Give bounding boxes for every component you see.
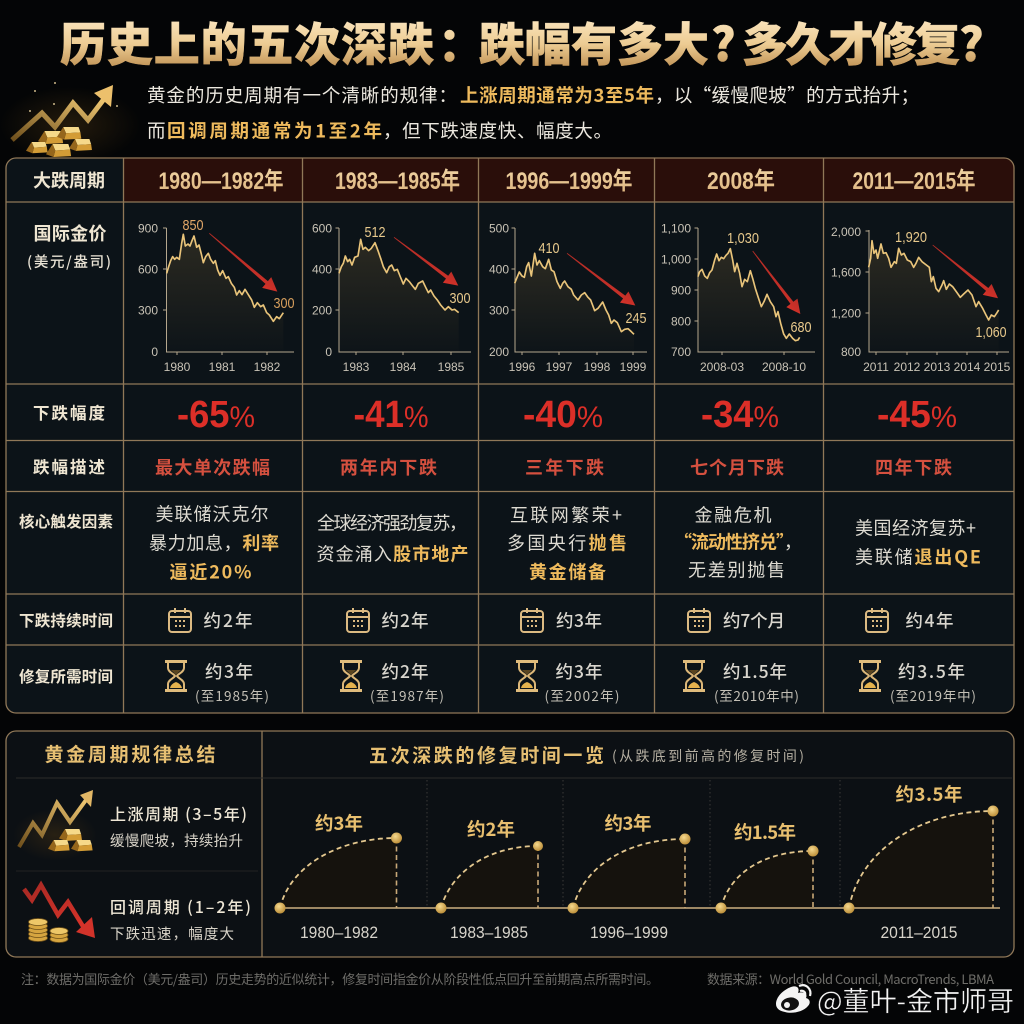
chart: 2008: 1,030 — [727, 230, 759, 247]
row: decline descriptions — [155, 454, 952, 480]
chart: recovery time arcs: 约2年 — [467, 816, 515, 842]
row: decline percentages: -45% — [877, 394, 957, 436]
chart: 1980-1982: 1980 — [164, 360, 191, 374]
column headers: 2008年 — [707, 168, 775, 195]
chart: 2008: 2008-10 — [762, 360, 806, 374]
row: decline duration — [169, 608, 954, 633]
watermark — [776, 980, 1014, 1019]
row: decline descriptions: 三年下跌 — [525, 454, 604, 480]
row labels: 修复所需时间 — [19, 665, 113, 687]
heading: recovery overview: 五次深跌的修复时间一览 — [369, 741, 604, 768]
chart: 1980-1982: 900 — [138, 222, 158, 236]
chart: 2008: 680 — [790, 319, 812, 336]
row labels — [19, 167, 113, 687]
chart: 1996-1999: 1999 — [620, 360, 647, 374]
text: rising cycle — [110, 801, 247, 851]
intro text: ，以“缓慢爬坡”的方式抬升； — [655, 82, 919, 108]
chart: 1983-1985: 400 — [312, 262, 332, 276]
chart: 1996-1999 — [489, 222, 647, 374]
chart: 1996-1999: 1998 — [584, 360, 611, 374]
row: core triggers: 全球经济强劲复苏， — [317, 510, 467, 536]
chart: 2008: 700 — [671, 345, 691, 359]
text: rising cycle: 缓慢爬坡，持续抬升 — [110, 830, 243, 851]
chart: 1996-1999: 245 — [626, 310, 646, 327]
intro text: 黄金的历史周期有一个清晰的规律： — [147, 82, 457, 108]
chart: recovery time arcs: 2011–2015 — [880, 924, 958, 942]
intro text: 上涨周期通常为3至5年 — [460, 82, 654, 108]
chart: 1980-1982 — [138, 217, 294, 374]
row: core triggers: 美联储退出QE — [855, 544, 981, 570]
row: core triggers: 互联网繁荣+ — [510, 502, 622, 528]
row: core triggers: 美联储沃克尔 — [156, 500, 268, 526]
heading: recovery overview — [369, 741, 804, 768]
chart: recovery time arcs — [274, 780, 1000, 942]
row: decline percentages: -34% — [701, 394, 779, 436]
title: 历史上的五次深跌 — [60, 9, 434, 75]
title: ： — [438, 9, 484, 75]
chart: 2011-2015: 1,920 — [895, 229, 927, 246]
row: recovery time — [165, 659, 976, 705]
chart: recovery time arcs: 1996–1999 — [590, 924, 668, 942]
row: decline descriptions: 四年下跌 — [875, 454, 952, 480]
chart: 2011-2015: 2,000 — [831, 225, 861, 239]
column headers: 1996—1999年 — [506, 168, 632, 195]
chart: recovery time arcs: 1983–1985 — [450, 924, 528, 942]
chart: 2008: 1,000 — [661, 252, 691, 266]
chart: 1983-1985: 600 — [312, 222, 332, 236]
row: decline descriptions: 两年内下跌 — [340, 454, 437, 480]
row labels: 大跌周期 — [33, 167, 105, 193]
row: recovery time: 约1.5年 — [723, 659, 787, 684]
row: core triggers: 暴力加息，利率 — [149, 530, 279, 556]
row: core triggers — [149, 500, 981, 584]
row labels: 下跌幅度 — [33, 400, 106, 424]
row: decline duration: 约3年 — [556, 608, 602, 633]
intro text: 而 — [147, 118, 166, 144]
text: correction cycle: 下跌迅速，幅度大 — [110, 923, 234, 944]
row: core triggers: 资金涌入股市地产 — [316, 540, 468, 566]
row: decline duration: 约2年 — [204, 608, 252, 633]
chart: 2008: 1,100 — [661, 222, 691, 236]
chart: 1996-1999: 300 — [489, 304, 509, 318]
heading: cycle summary: 黄金周期规律总结 — [44, 740, 216, 767]
row: core triggers: 黄金储备 — [529, 558, 606, 584]
chart: 1980-1982: 1981 — [209, 360, 236, 374]
chart: 1996-1999: 400 — [489, 262, 509, 276]
row: decline duration: 约2年 — [382, 608, 428, 633]
chart: 2011-2015: 1,200 — [831, 306, 861, 320]
chart: 1983-1985: 200 — [312, 304, 332, 318]
column headers: 2011—2015年 — [852, 168, 976, 195]
chart: 1983-1985: 1983 — [343, 360, 370, 374]
intro text: 回调周期通常为1至2年 — [167, 118, 382, 144]
icon: weibo logo — [776, 985, 810, 1013]
chart: 1980-1982: 300 — [138, 304, 158, 318]
chart: 2008: 800 — [671, 314, 691, 328]
row: core triggers: 逼近20% — [170, 558, 252, 584]
row: recovery time: (至2002年) — [544, 685, 620, 705]
title — [60, 9, 984, 75]
row: recovery time: (至1985年) — [195, 685, 269, 705]
chart: 1983-1985: 300 — [450, 290, 470, 307]
chart: 1983-1985 — [312, 222, 471, 374]
row: recovery time: 约3年 — [556, 659, 602, 684]
row: decline duration: 约4年 — [906, 608, 954, 633]
chart: 1983-1985: 512 — [364, 224, 386, 241]
chart: recovery time arcs: 约3年 — [315, 810, 363, 836]
row: core triggers: 无差别抛售 — [688, 556, 785, 582]
row labels: 跌幅描述 — [33, 454, 106, 478]
panel: comparison table — [6, 158, 1014, 713]
chart: 2011-2015: 2015 — [984, 360, 1011, 374]
title: 跌幅有多大 — [479, 9, 709, 75]
chart: recovery time arcs: 1980–1982 — [300, 924, 378, 942]
row labels: 下跌持续时间 — [19, 609, 113, 631]
row: recovery time: (至1987年) — [370, 685, 444, 705]
row: decline percentages: -40% — [523, 394, 603, 436]
chart: 1996-1999: 410 — [538, 240, 560, 257]
row labels: 国际金价 — [34, 220, 106, 246]
chart: recovery time arcs: 约3.5年 — [896, 781, 962, 807]
chart: 1980-1982: 1982 — [254, 360, 281, 374]
chart: 2011-2015: 2012 — [894, 360, 921, 374]
row: recovery time: (至2019年中) — [890, 685, 976, 705]
chart: recovery time arcs: 约1.5年 — [734, 819, 796, 845]
row: core triggers: 金融危机 — [694, 502, 772, 528]
row: core triggers: 多国央行抛售 — [507, 530, 627, 556]
title: ? — [711, 9, 736, 75]
chart: 2011-2015 — [831, 225, 1011, 374]
chart: 2008: 900 — [671, 284, 691, 298]
chart: 1980-1982: 300 — [274, 295, 294, 312]
row: recovery time: 约3年 — [205, 659, 253, 684]
chart: 1980-1982: 850 — [182, 217, 204, 234]
chart: 1980-1982: 600 — [138, 262, 158, 276]
icon: red falling arrow with coins — [24, 885, 95, 942]
row: recovery time: (至2010年中) — [714, 685, 799, 705]
column headers: 1980—1982年 — [158, 168, 284, 195]
text: correction cycle: 回调周期 (1–2年) — [110, 894, 251, 918]
row: decline descriptions: 最大单次跌幅 — [155, 454, 270, 480]
chart: 1996-1999: 500 — [489, 222, 509, 236]
column headers — [158, 168, 976, 195]
chart: 2008: 2008-03 — [700, 360, 744, 374]
chart: 1980-1982: 0 — [151, 345, 158, 359]
title: ? — [959, 9, 984, 75]
chart: 1983-1985: 1985 — [438, 360, 465, 374]
chart: 1996-1999: 1996 — [509, 360, 536, 374]
row: decline percentages — [177, 394, 957, 436]
title: 多久才修复 — [742, 9, 960, 75]
row: core triggers: 美国经济复苏+ — [855, 514, 976, 540]
row: decline descriptions: 七个月下跌 — [690, 454, 784, 480]
panel: summary and recovery overview — [6, 731, 1014, 957]
icon: gold rising arrow — [13, 790, 97, 861]
row labels: (美元/盎司) — [27, 251, 111, 272]
chart: 2011-2015: 2013 — [924, 360, 951, 374]
row: core triggers: “流动性挤兑”， — [674, 528, 802, 554]
chart: 2011-2015: 2011 — [863, 360, 889, 374]
chart: 2011-2015: 2014 — [954, 360, 981, 374]
chart: 1996-1999: 200 — [489, 345, 509, 359]
chart: 2011-2015: 1,060 — [976, 324, 1006, 341]
chart: 1983-1985: 0 — [325, 345, 332, 359]
text: rising cycle: 上涨周期 (3–5年) — [110, 801, 247, 825]
chart: 2008 — [661, 222, 815, 374]
chart: recovery time arcs: 约3年 — [604, 810, 652, 836]
heading: recovery overview: (从跌底到前高的修复时间) — [612, 746, 804, 766]
chart: 1996-1999: 1997 — [546, 360, 573, 374]
row: recovery time: 约3.5年 — [898, 659, 965, 684]
column headers: 1983—1985年 — [335, 168, 460, 195]
footnote: 注：数据为国际金价（美元/盎司）历史走势的近似统计，修复时间指金价从阶段性低点回升至前期高点所需时间。 — [21, 969, 659, 988]
intro text: ，但下跌速度快、幅度大。 — [383, 118, 612, 144]
intro text — [147, 82, 919, 144]
watermark text: @董叶-金市师哥 — [817, 980, 1014, 1019]
data source: 数据来源：World Gold Council, MacroTrends, LBMA — [707, 969, 994, 988]
row: decline percentages: -65% — [177, 394, 255, 436]
chart: 1983-1985: 1984 — [390, 360, 417, 374]
icon: rising gold arrow with gold bars — [0, 82, 140, 163]
row: recovery time: 约2年 — [382, 659, 428, 684]
chart: 2011-2015: 1,600 — [831, 266, 861, 280]
row labels: 核心触发因素 — [19, 510, 113, 532]
row: decline duration: 约7个月 — [723, 608, 785, 633]
chart: 2011-2015: 800 — [841, 345, 861, 359]
text: correction cycle — [110, 894, 251, 944]
row: decline percentages: -41% — [354, 394, 428, 436]
